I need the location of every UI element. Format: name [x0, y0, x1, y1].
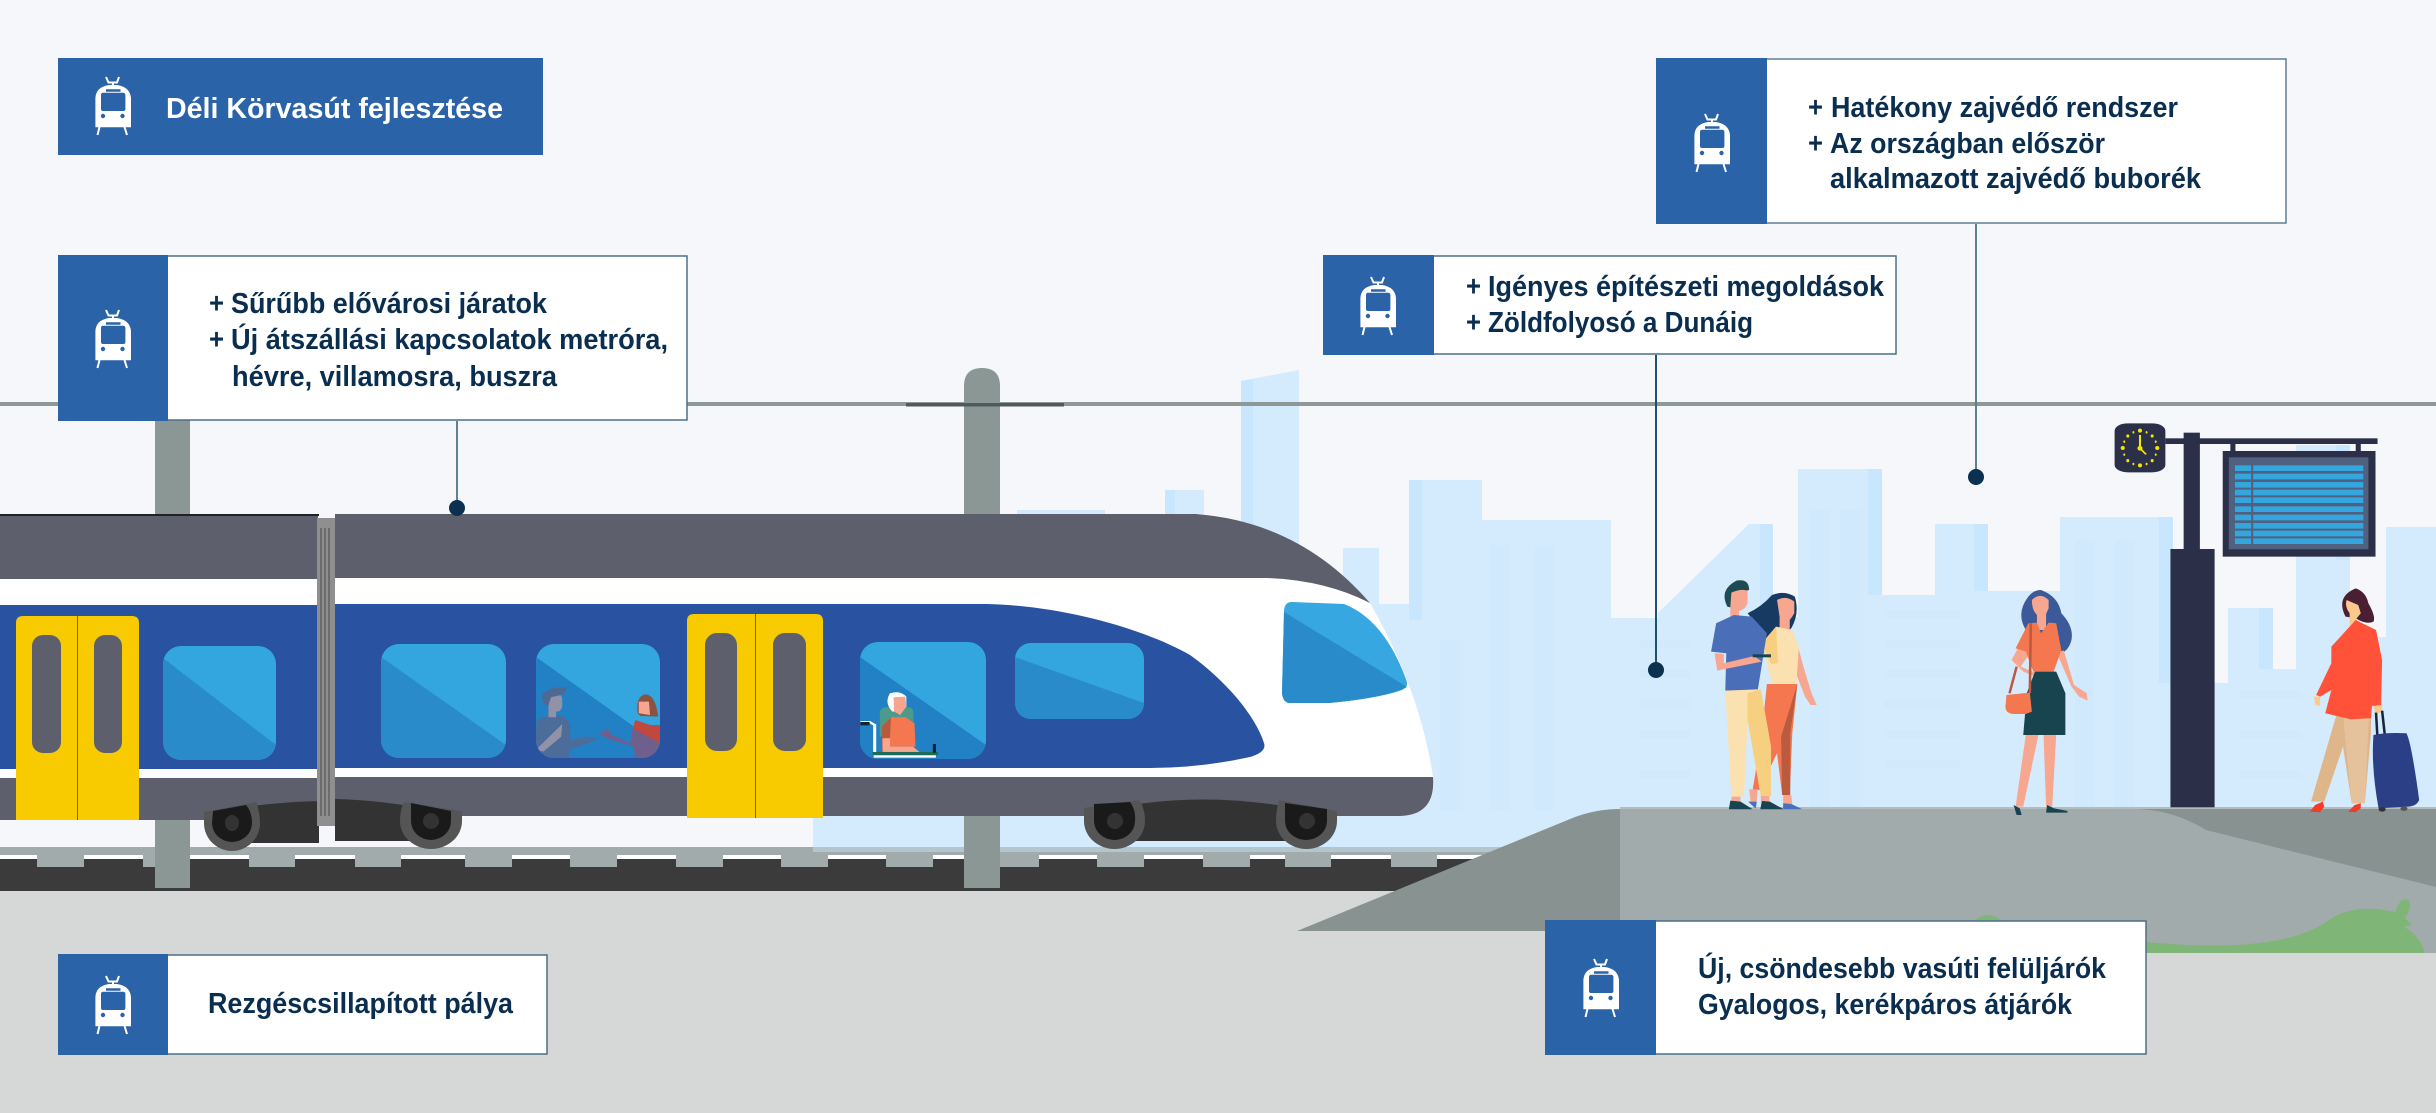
- panel: frequency and connections: [58, 255, 687, 421]
- leader line: frequency callout: [449, 421, 465, 516]
- icon: tram: [1360, 277, 1396, 335]
- windows: [163, 642, 1144, 760]
- callout text: alkalmazott zajvédő buborék: [1830, 163, 2202, 195]
- couple: woman: [1748, 593, 1817, 809]
- bogies: [204, 799, 1337, 851]
- callout text: [1466, 271, 1885, 339]
- windscreen: [1282, 602, 1407, 703]
- people on platform: [1711, 580, 2419, 815]
- rear carriage: [0, 514, 319, 820]
- woman with suitcase: [2310, 588, 2419, 812]
- bush: [1970, 900, 2425, 953]
- doors: [16, 614, 823, 820]
- train: [0, 514, 1433, 851]
- couple: man: [1711, 580, 1784, 809]
- callout text: Igényes építészeti megoldások: [1488, 271, 1885, 303]
- callout text: Zöldfolyosó a Dunáig: [1488, 307, 1753, 339]
- support pole left: [155, 400, 190, 888]
- callout text: hévre, villamosra, buszra: [232, 361, 558, 393]
- callout text: [1808, 92, 2202, 195]
- platform: [1297, 807, 2436, 953]
- panel: vibration damped track: [58, 954, 547, 1055]
- panel: noise protection: [1656, 58, 2286, 224]
- icon: tram: [95, 976, 131, 1034]
- callout text: +: [1808, 128, 1823, 160]
- departure board: [2223, 451, 2376, 557]
- callout text: [209, 288, 668, 393]
- callout text: +: [209, 324, 224, 356]
- passengers in window: [536, 687, 660, 760]
- callout text: Hatékony zajvédő rendszer: [1831, 92, 2178, 124]
- leader line: noise callout: [1968, 224, 1984, 485]
- clock: [2115, 423, 2165, 472]
- support pole centre: [964, 368, 1000, 888]
- callout text: Rezgéscsillapított pálya: [208, 988, 514, 1020]
- city skyline: [813, 370, 2436, 852]
- icon: tram: [1583, 959, 1619, 1017]
- ground: [0, 891, 2436, 1113]
- leader line: architecture callout: [1648, 355, 1664, 678]
- front carriage: [335, 514, 1433, 816]
- title text: Déli Körvasút fejlesztése: [166, 93, 503, 125]
- callout text: +: [1466, 271, 1481, 303]
- callout text: +: [1808, 92, 1823, 124]
- callout text: Új, csöndesebb vasúti felüljárók: [1698, 951, 2107, 985]
- callout text: [1698, 951, 2107, 1021]
- panel: title: [58, 58, 543, 155]
- panel: architecture: [1323, 255, 1896, 355]
- overhead wire: [0, 402, 2436, 406]
- callout text: +: [209, 288, 224, 320]
- railway track: [0, 847, 1503, 891]
- panel: overpasses: [1545, 920, 2146, 1055]
- woman with shoulder bag: [2005, 590, 2088, 815]
- callout text: +: [1466, 307, 1481, 339]
- pole crossbar: [906, 403, 1064, 406]
- icon: tram: [1694, 114, 1730, 172]
- icon: tram: [95, 77, 131, 135]
- callout text: Az országban először: [1830, 128, 2105, 160]
- callout text: Új átszállási kapcsolatok metróra,: [231, 322, 668, 356]
- callout text: Gyalogos, kerékpáros átjárók: [1698, 989, 2073, 1021]
- callout text: Sűrűbb elővárosi járatok: [231, 288, 548, 320]
- station clock and departure board: [2115, 423, 2378, 807]
- wheelchair passenger: [860, 692, 938, 758]
- carriage connector: [317, 518, 335, 826]
- icon: tram: [95, 310, 131, 368]
